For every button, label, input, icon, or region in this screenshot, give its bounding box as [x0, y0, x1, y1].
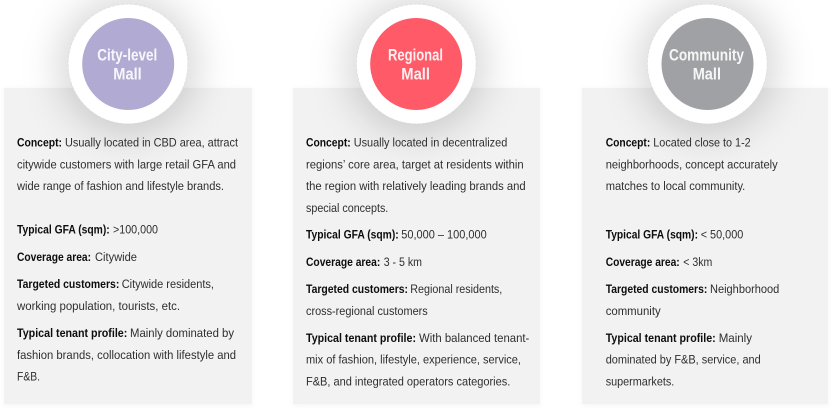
icon: regional mall badge — [345, 0, 487, 137]
panel: regional mall — [293, 0, 540, 406]
targeted customers: working population, tourists, etc. — [16, 299, 180, 313]
typical tenant profile: Typical tenant profile: — [306, 331, 416, 345]
concept text: wide range of fashion and lifestyle brands. — [16, 179, 224, 193]
typical GFA: Typical GFA (sqm): — [17, 223, 110, 237]
concept text — [606, 136, 779, 193]
typical tenant profile: mix of fashion, lifestyle, experience, service, — [306, 353, 521, 367]
icon: regional mall badge: Regional — [388, 46, 443, 64]
concept text: citywide customers with large retail GFA and — [17, 157, 236, 171]
typical tenant profile: dominated by F&B, service, and — [606, 353, 761, 367]
targeted customers — [606, 282, 779, 318]
targeted customers — [16, 277, 214, 313]
concept text: Usually located in decentralized — [354, 136, 507, 150]
typical tenant profile — [606, 331, 761, 389]
targeted customers: community — [606, 304, 662, 318]
coverage area: Coverage area: — [17, 250, 91, 264]
coverage area: Coverage area: — [606, 255, 680, 269]
targeted customers: Targeted customers: — [306, 282, 408, 296]
concept text: Concept: — [306, 136, 351, 150]
typical GFA — [306, 228, 487, 242]
typical tenant profile: supermarkets. — [606, 375, 674, 389]
card background — [293, 88, 540, 406]
targeted customers — [306, 282, 502, 318]
typical GFA: < 50,000 — [701, 228, 743, 242]
typical tenant profile — [306, 331, 529, 389]
targeted customers: Neighborhood — [710, 282, 779, 296]
concept text — [16, 136, 239, 193]
coverage area: Coverage area: — [306, 255, 380, 269]
targeted customers: Targeted customers: — [606, 282, 707, 296]
typical tenant profile: Mainly — [719, 331, 753, 345]
coverage area: Citywide — [95, 250, 137, 264]
concept text: Usually located in CBD area, attract — [65, 136, 239, 150]
coverage area: 3 - 5 km — [384, 255, 422, 269]
icon: community mall badge — [636, 0, 778, 137]
concept text: the region with relatively leading brands and — [306, 179, 526, 193]
icon: city-level mall badge: City-level — [97, 46, 157, 64]
concept text: Concept: — [606, 136, 650, 150]
typical tenant profile: Mainly dominated by — [130, 326, 235, 340]
typical tenant profile: F&B, and integrated operators categories. — [306, 375, 510, 389]
typical GFA: 50,000 – 100,000 — [401, 228, 487, 242]
concept text: Concept: — [17, 136, 62, 150]
concept text: Located close to 1-2 — [653, 136, 751, 150]
panel: city-level mall — [4, 0, 252, 406]
icon: regional mall badge: Mall — [401, 65, 430, 83]
card background — [582, 88, 828, 406]
icon: community mall badge: Community — [669, 46, 745, 64]
concept text: special concepts. — [306, 201, 388, 215]
coverage area: < 3km — [683, 255, 712, 269]
concept text: neighborhoods, concept accurately — [606, 157, 779, 171]
targeted customers: Citywide residents, — [122, 277, 214, 291]
typical tenant profile: Typical tenant profile: — [606, 331, 716, 345]
typical tenant profile: fashion brands, collocation with lifestyle and — [17, 348, 236, 362]
concept text: regions’ core area, target at residents within — [306, 157, 524, 171]
typical tenant profile: With balanced tenant- — [419, 331, 529, 345]
targeted customers: cross-regional customers — [306, 304, 428, 318]
panel: community mall — [582, 0, 828, 406]
typical GFA: Typical GFA (sqm): — [606, 228, 698, 242]
targeted customers: Regional residents, — [410, 282, 502, 296]
typical tenant profile: Typical tenant profile: — [17, 326, 127, 340]
typical tenant profile: F&B. — [17, 370, 40, 384]
typical tenant profile — [17, 326, 236, 384]
concept text — [306, 136, 526, 215]
icon: city-level mall badge — [57, 0, 199, 137]
concept text: matches to local community. — [606, 179, 745, 193]
card background — [4, 88, 252, 406]
icon: city-level mall badge: Mall — [113, 65, 142, 83]
targeted customers: Targeted customers: — [17, 277, 119, 291]
typical GFA: >100,000 — [113, 223, 158, 237]
icon: community mall badge: Mall — [693, 65, 721, 83]
typical GFA: Typical GFA (sqm): — [306, 228, 399, 242]
